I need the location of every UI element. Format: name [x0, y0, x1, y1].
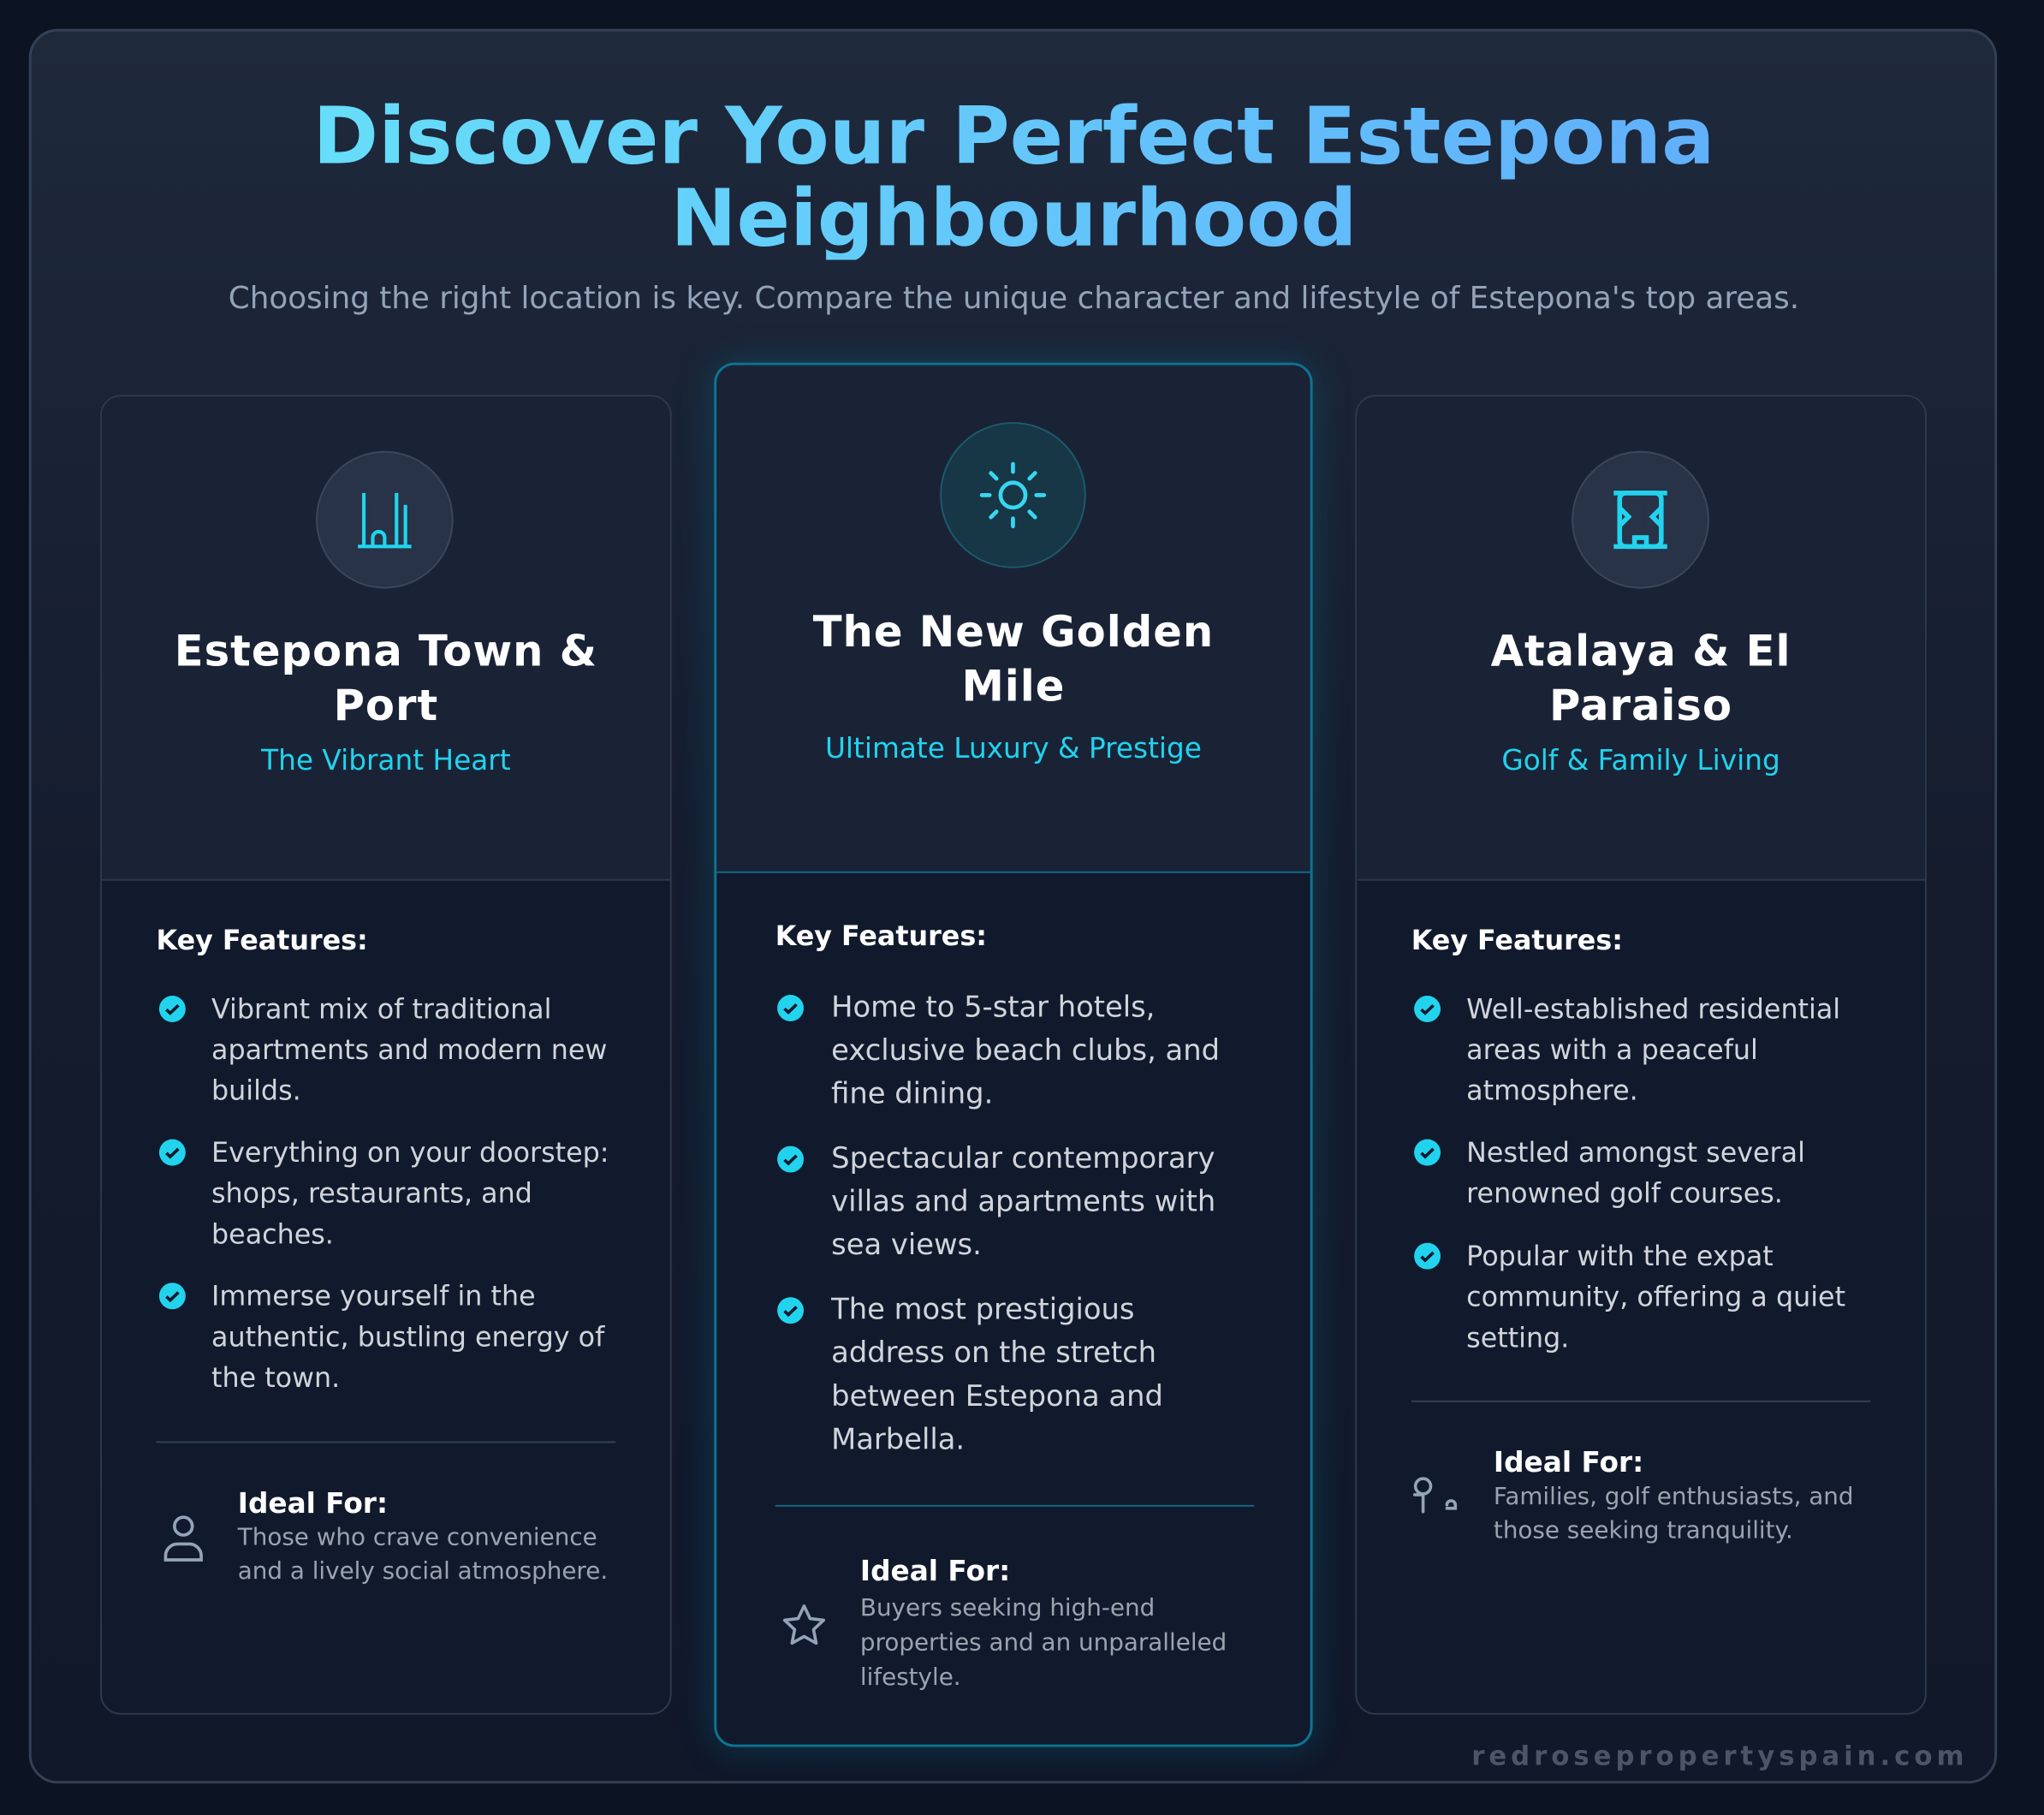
title: Neighbourhood: [670, 172, 1358, 265]
ideal for: left: Ideal For:: [238, 1486, 388, 1520]
bullet list: left: Everything on your doorstep:: [211, 1136, 609, 1169]
card header: [102, 396, 670, 881]
icon: star: [782, 1604, 825, 1645]
key features heading: Key Features:: [775, 919, 987, 952]
key features heading: Key Features:: [157, 924, 368, 956]
ideal for: middle: Buyers seeking high-end: [860, 1593, 1155, 1622]
card title: Atalaya & El Paraiso: Atalaya & El: [1491, 627, 1791, 676]
bullet list: right: [1414, 993, 1845, 1354]
panel: The New Golden Mile: [714, 363, 1313, 1747]
bullet 2: [777, 1141, 1215, 1262]
ideal for: middle: lifestyle.: [860, 1663, 961, 1691]
title: [0, 95, 2028, 260]
bullet list: left: apartments and modern new: [211, 1033, 607, 1066]
card title: The New Golden Mile: [813, 607, 1214, 711]
card title: Estepona Town & Port: Estepona Town &: [175, 627, 597, 676]
bullet list: right: Nestled amongst several: [1466, 1136, 1805, 1169]
card title: The New Golden Mile: The New Golden: [813, 607, 1214, 657]
bullet list: right: community, offering a quiet: [1466, 1281, 1845, 1313]
bullet list: right: setting.: [1466, 1322, 1569, 1354]
bullet list: middle: Spectacular contemporary: [831, 1141, 1215, 1175]
bullet 1: [159, 993, 607, 1107]
bullet list: middle: villas and apartments with: [831, 1185, 1215, 1219]
title: Discover Your Perfect Estepona: [313, 90, 1714, 182]
bullet list: right: atmosphere.: [1466, 1074, 1638, 1107]
ideal for: right: Ideal For:: [1494, 1445, 1643, 1479]
card title: Estepona Town & Port: Port: [334, 681, 438, 730]
ideal for: middle: properties and an unparalleled: [860, 1628, 1227, 1656]
bullet list: left: builds.: [211, 1074, 301, 1107]
bullet list: middle: fine dining.: [831, 1077, 993, 1111]
bullet 3: [1414, 1240, 1845, 1354]
ideal for: left: Those who crave convenience: [238, 1523, 597, 1550]
ideal for: left: [238, 1486, 608, 1585]
bullet 3: [777, 1293, 1163, 1456]
card subtitle: Golf & Family Living: [1501, 743, 1780, 777]
bullet list: left: beaches.: [211, 1218, 334, 1250]
panel: Atalaya & El Paraiso: [1355, 395, 1927, 1715]
bullet list: middle: address on the stretch: [831, 1336, 1156, 1370]
card header: [716, 366, 1310, 873]
bullet list: left: shops, restaurants, and: [211, 1177, 532, 1210]
bullet list: middle: Marbella.: [831, 1423, 965, 1456]
bullet list: right: areas with a peaceful: [1466, 1033, 1758, 1066]
bullet list: middle: [777, 991, 1220, 1456]
card subtitle: The Vibrant Heart: [261, 743, 511, 777]
bullet list: left: the town.: [211, 1361, 340, 1394]
card title: Estepona Town & Port: [175, 627, 597, 730]
bullet list: middle: The most prestigious: [831, 1293, 1134, 1327]
icon: golf: [1412, 1477, 1457, 1514]
panel: Estepona Town & Port: [100, 395, 672, 1715]
ideal for: left: and a lively social atmosphere.: [238, 1556, 608, 1585]
bullet list: right: Popular with the expat: [1466, 1240, 1774, 1272]
bullet 2: [159, 1136, 609, 1250]
subtitle: Choosing the right location is key. Compare the unique character and lifestyle of Estepona's top areas.: [229, 281, 1799, 316]
bullet 3: [159, 1280, 605, 1394]
card title: Atalaya & El Paraiso: Paraiso: [1549, 681, 1732, 730]
icon: building: [1572, 451, 1709, 588]
bullet 1: [1414, 993, 1840, 1107]
ideal for: right: Families, golf enthusiasts, and: [1494, 1482, 1854, 1510]
bullet list: right: Well-established residential: [1466, 993, 1840, 1025]
ideal for: middle: [860, 1554, 1227, 1691]
card title: The New Golden Mile: Mile: [961, 662, 1065, 711]
bullet list: middle: exclusive beach clubs, and: [831, 1033, 1220, 1068]
bullet list: left: Immerse yourself in the: [211, 1280, 536, 1312]
watermark: redrosepropertyspain.com: [1471, 1741, 1968, 1771]
bullet list: left: authentic, bustling energy of: [211, 1321, 604, 1353]
bullet 2: [1414, 1136, 1805, 1210]
card title: Atalaya & El Paraiso: [1491, 627, 1791, 730]
bullet list: right: renowned golf courses.: [1466, 1177, 1783, 1210]
card header: [1357, 396, 1925, 881]
bullet 1: [777, 991, 1220, 1111]
ideal for: right: those seeking tranquility.: [1494, 1516, 1793, 1544]
ideal for: right: [1494, 1445, 1854, 1544]
bullet list: left: [159, 993, 609, 1394]
bullet list: middle: Home to 5-star hotels,: [831, 991, 1155, 1024]
icon: person: [164, 1515, 203, 1562]
ideal for: middle: Ideal For:: [860, 1554, 1010, 1587]
bullet list: middle: sea views.: [831, 1228, 982, 1262]
bullet list: middle: between Estepona and: [831, 1379, 1163, 1413]
bullet list: left: Vibrant mix of traditional: [211, 993, 551, 1025]
icon: sun: [940, 422, 1086, 568]
key features heading: Key Features:: [1411, 924, 1623, 956]
card subtitle: Ultimate Luxury & Prestige: [825, 731, 1202, 765]
icon: buildings: [316, 451, 454, 588]
